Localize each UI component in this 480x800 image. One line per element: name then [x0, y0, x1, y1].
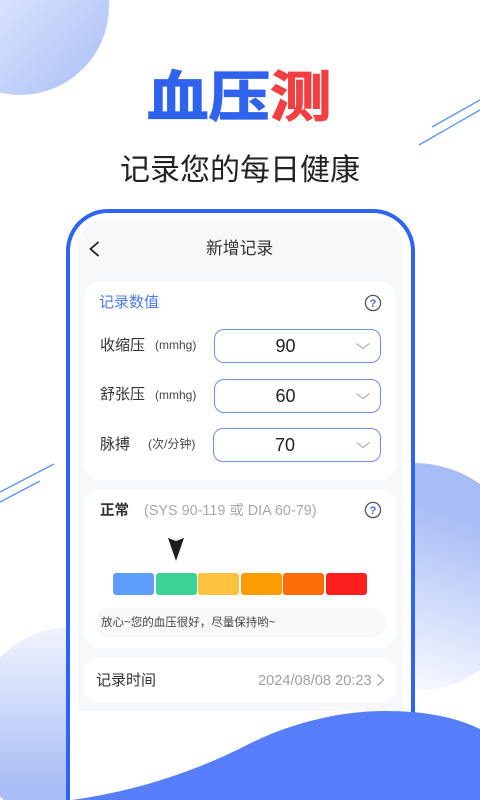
systolic row: (mmhg) — [155, 338, 196, 352]
bottom wave — [72, 711, 480, 800]
advice message — [95, 608, 386, 637]
pulse row — [100, 428, 381, 462]
systolic row: 收缩压 — [100, 337, 145, 354]
advice message: 放心~您的血压很好，尽量保持哟~ — [101, 617, 275, 629]
record time value: 2024/08/08 20:23 — [258, 673, 372, 689]
icon: help — [364, 294, 382, 312]
panel: record time — [84, 657, 396, 703]
section heading: 记录数值 — [99, 294, 159, 311]
diastolic row — [100, 379, 381, 413]
icon: help: ? — [370, 505, 377, 517]
subtitle: 记录您的每日健康 — [120, 154, 360, 187]
systolic row: 90 — [275, 336, 296, 356]
status range: (SYS 90-119 或 DIA 60-79) — [144, 503, 317, 519]
panel: status — [84, 489, 396, 648]
icon: chevron — [377, 674, 384, 686]
app screen panel — [78, 220, 403, 711]
icon: pointer — [168, 538, 184, 561]
record time label: 记录时间 — [96, 672, 156, 689]
gauge bar — [113, 573, 367, 595]
panel: record values — [84, 282, 396, 480]
icon: help — [364, 502, 382, 518]
phone frame — [66, 209, 415, 800]
icon: help: ? — [370, 298, 377, 310]
pulse row: 脉搏 — [100, 436, 130, 453]
diastolic row: (mmhg) — [155, 388, 196, 402]
status label: 正常 — [100, 503, 129, 519]
systolic row — [100, 329, 381, 363]
title: 血压测 — [147, 67, 332, 128]
pulse row: 70 — [275, 435, 295, 455]
pulse row: (次/分钟) — [148, 437, 195, 451]
screen heading: 新增记录 — [206, 239, 273, 258]
icon: back arrow — [89, 241, 99, 257]
diastolic row: 舒张压 — [100, 386, 145, 403]
diastolic row: 60 — [275, 386, 296, 406]
